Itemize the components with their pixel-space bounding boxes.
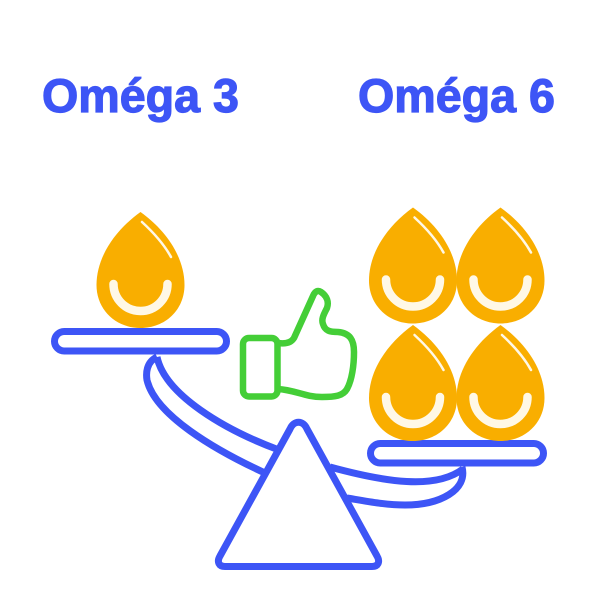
icon: left scale arm — [147, 357, 279, 473]
title: Oméga 6: Oméga 6 — [358, 69, 555, 122]
icon: right plate — [370, 444, 544, 463]
icon: thumbs up — [243, 291, 354, 397]
title: Oméga 3: Oméga 3 — [42, 69, 239, 122]
icon: oil drop omega 3 — [96, 212, 184, 328]
icon: oil drops omega 6 — [369, 208, 544, 441]
icon: right scale arm — [330, 467, 463, 505]
icon: left plate — [54, 332, 226, 351]
icon: triangle fulcrum — [218, 422, 379, 566]
